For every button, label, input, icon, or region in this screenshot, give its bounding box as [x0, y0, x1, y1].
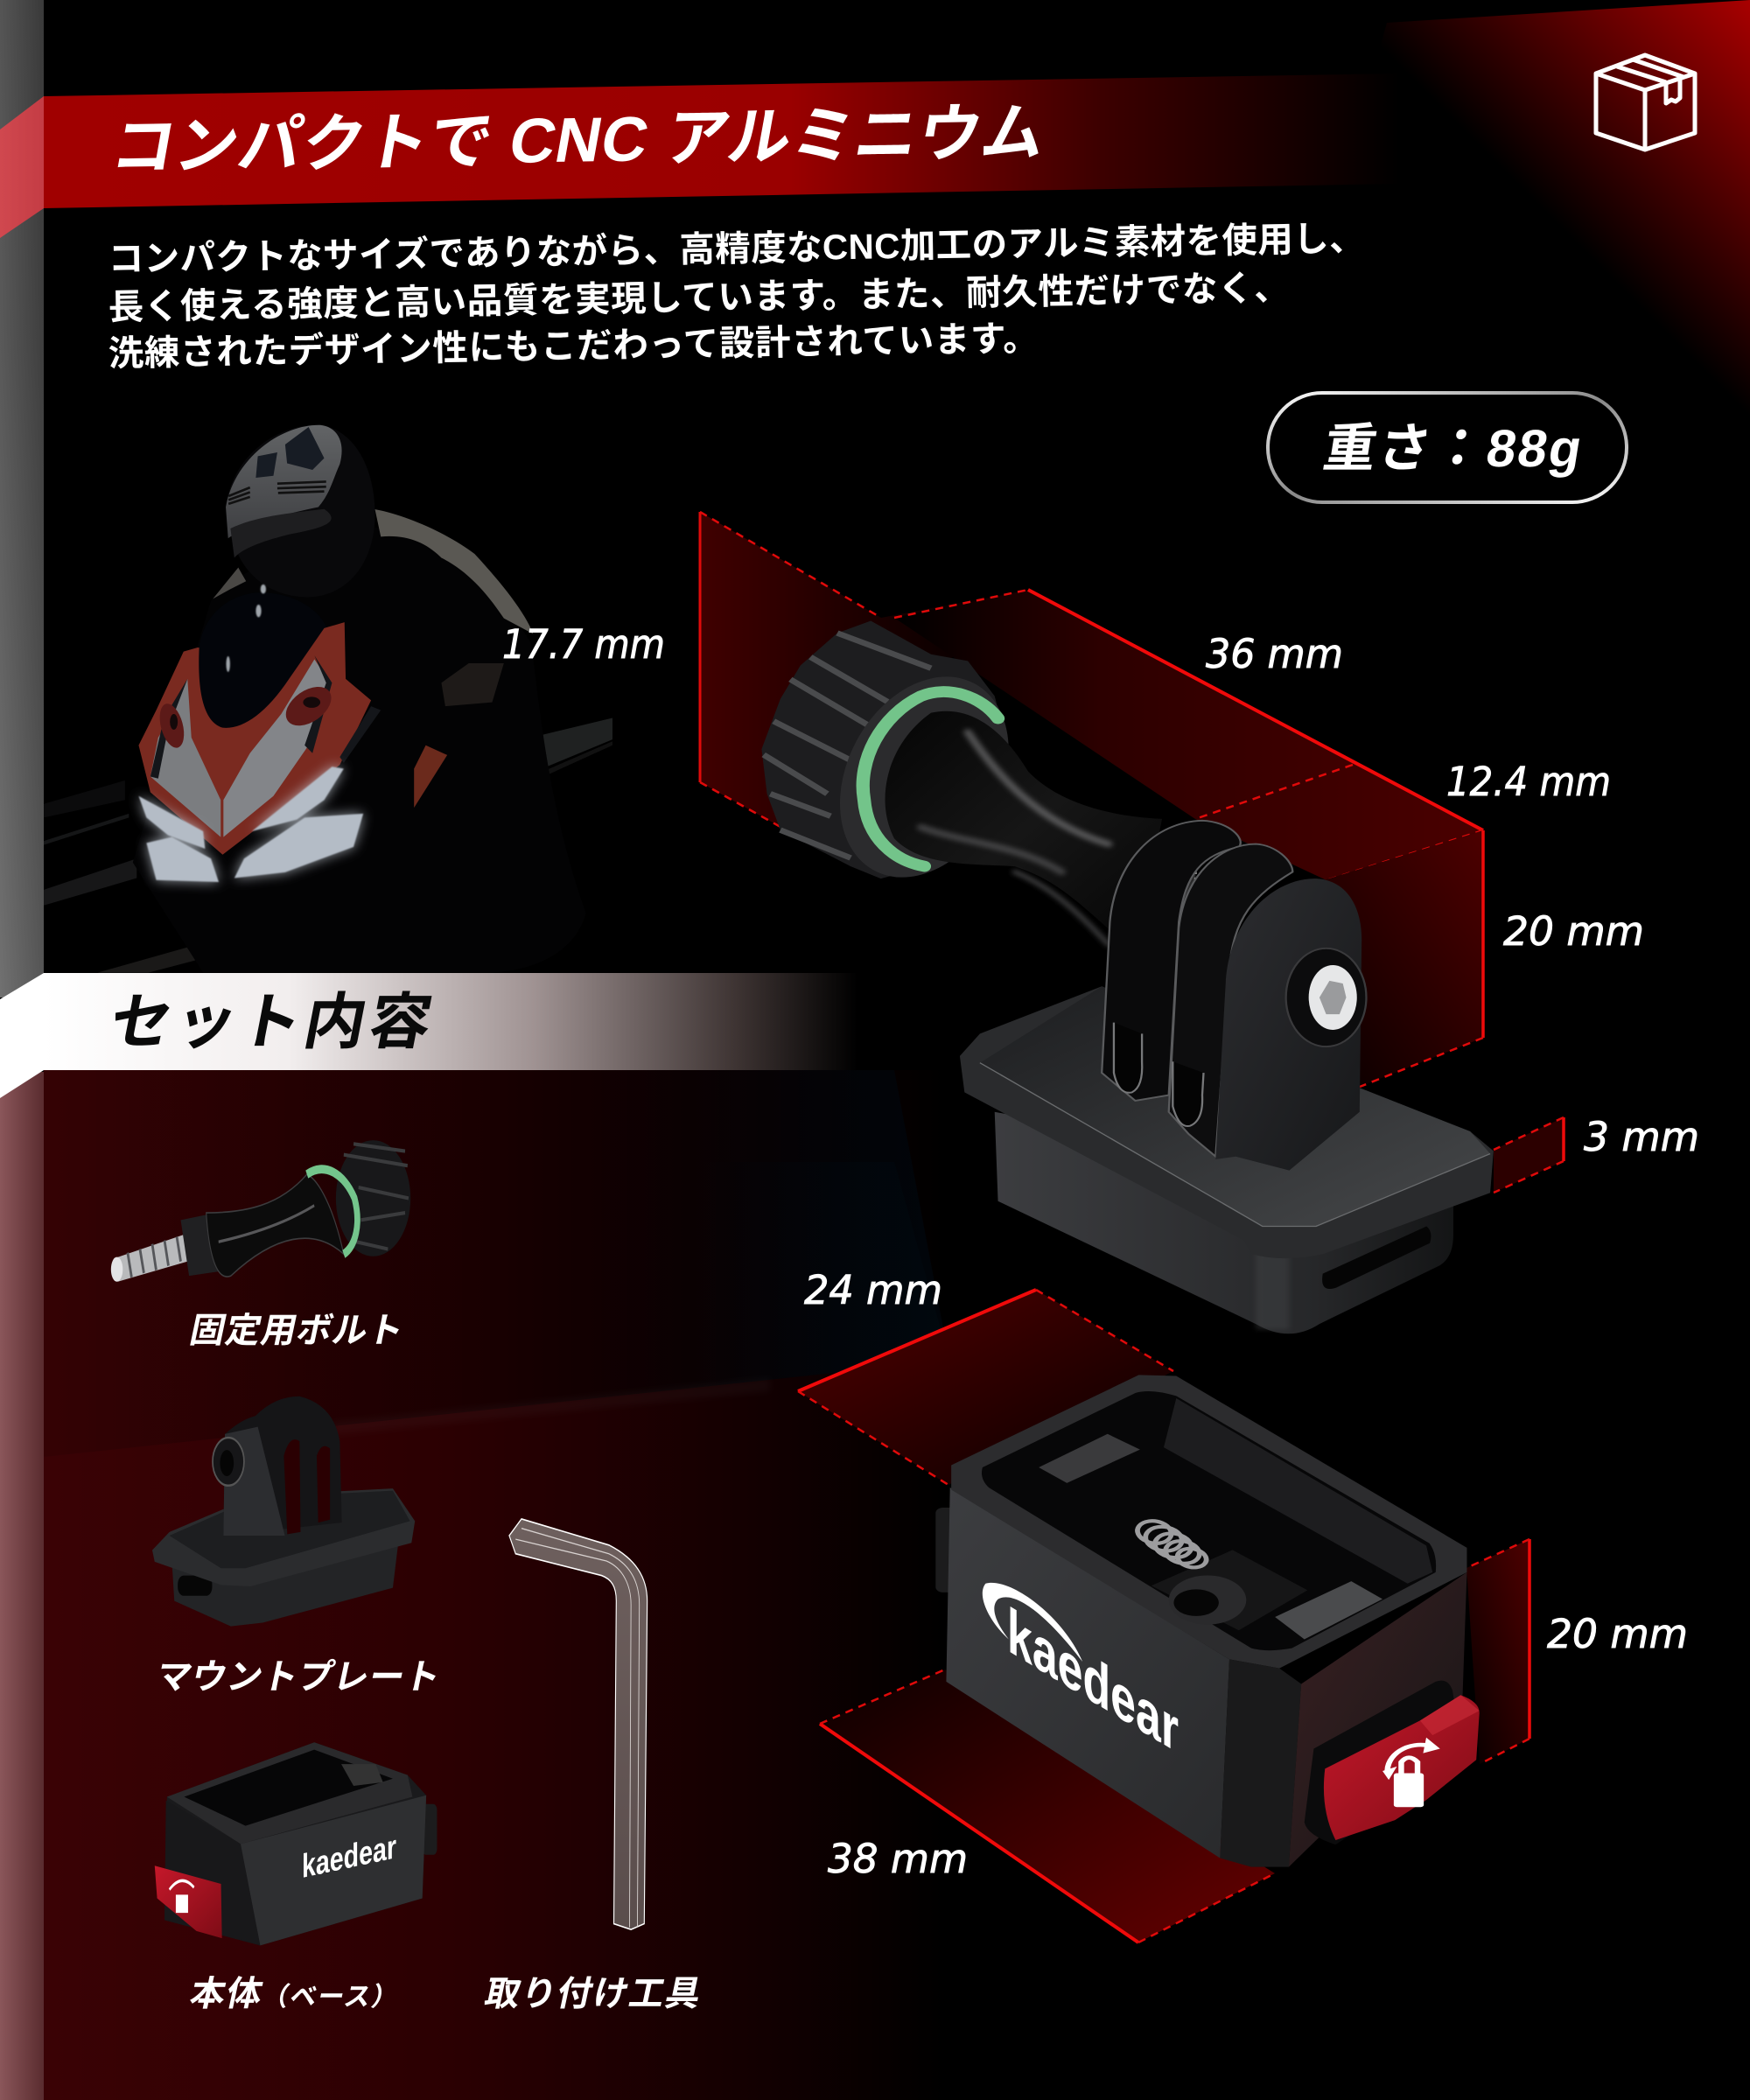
silhouette	[164, 1742, 426, 1945]
arm block	[223, 1396, 342, 1536]
plate	[152, 1488, 415, 1586]
tab	[341, 1764, 383, 1786]
front	[241, 1796, 426, 1945]
left strip: gray upper	[0, 0, 44, 998]
dimensions: upper mount	[700, 512, 1564, 1193]
left face	[946, 1488, 1229, 1858]
bolt end	[213, 1438, 244, 1486]
hex socket	[1320, 981, 1347, 1014]
silver washer	[1309, 965, 1357, 1030]
section heading: セット内容	[104, 988, 438, 1056]
arm slots	[1114, 1023, 1204, 1126]
product: set items	[111, 1140, 648, 1945]
helmet top	[226, 425, 342, 538]
red tank piece	[414, 746, 447, 808]
captions	[152, 1310, 705, 2013]
line 2: 長く使える強度と高い品質を実現しています。また、耐久性だけでなく、	[108, 268, 1290, 327]
ball stem	[885, 711, 1162, 950]
knurled thread	[1142, 872, 1195, 944]
rim top	[951, 1375, 1466, 1669]
plate top face	[980, 986, 1490, 1226]
headlight glow	[138, 766, 363, 882]
fold white	[0, 973, 44, 1098]
side knob	[935, 1508, 961, 1592]
button bevel	[1420, 1695, 1480, 1735]
item: mini base	[155, 1742, 437, 1945]
weight badge	[1268, 393, 1627, 502]
stem highlights	[921, 732, 1109, 944]
left strip: red lower	[0, 1072, 44, 2100]
panel 38mm	[820, 1670, 1275, 1942]
collar	[181, 1213, 223, 1276]
red button	[155, 1866, 222, 1938]
tab 2	[1275, 1581, 1382, 1639]
line 3: 洗練されたデザイン性にもこだわって設計されています。	[108, 318, 1039, 374]
label 17.7: 17.7 mm	[502, 621, 665, 668]
plate lower body	[995, 1112, 1453, 1334]
item: bolt	[111, 1140, 410, 1282]
knob	[761, 620, 1003, 878]
arm 1	[1102, 821, 1241, 1101]
red fairing	[138, 622, 371, 855]
dark panel stripes	[150, 655, 381, 779]
hex key edges	[515, 1529, 640, 1928]
plate highlight	[980, 1063, 1490, 1226]
caption: tool: 取り付け工具	[481, 1973, 705, 2013]
label 12.4: 12.4 mm	[1446, 759, 1611, 805]
red lock button	[1324, 1695, 1480, 1840]
knob ridges	[764, 633, 931, 858]
helmet dark panel	[256, 427, 325, 478]
dimensions: lower base	[798, 1290, 1530, 1942]
lower body	[172, 1539, 399, 1627]
logo text: base: kaedear	[1007, 1593, 1179, 1767]
stem highlight	[219, 1206, 314, 1242]
stem	[206, 1174, 344, 1277]
arm front face	[223, 1427, 284, 1536]
weight text: 重さ：88g	[1320, 418, 1586, 478]
windshield	[199, 592, 328, 728]
label 3: 3 mm	[1584, 1114, 1699, 1160]
inner wall	[1164, 1398, 1432, 1584]
right white panel	[223, 660, 330, 837]
helmet shell	[228, 425, 374, 571]
jacket	[133, 735, 550, 961]
label 20 upper: 20 mm	[1503, 908, 1644, 955]
label 36: 36 mm	[1206, 631, 1343, 677]
logo text: mini base: kaedear	[302, 1828, 396, 1886]
jacket shoulder stripe	[375, 509, 533, 634]
label 38: 38 mm	[828, 1836, 968, 1882]
body text	[108, 218, 1365, 374]
front arm	[1215, 878, 1362, 1171]
icon: box	[1596, 55, 1695, 150]
panel 20mm lower	[1466, 1539, 1530, 1764]
panel 3mm	[1494, 1117, 1564, 1193]
top	[167, 1742, 412, 1844]
helmet chin	[230, 509, 332, 557]
panel 17.7mm	[700, 512, 1028, 827]
line 1: コンパクトなサイズでありながら、高精度なCNC加工のアルミ素材を使用し、	[108, 218, 1365, 279]
spring	[1131, 1516, 1211, 1572]
glove	[441, 663, 504, 706]
caption: bolt: 固定用ボルト	[186, 1310, 408, 1350]
label 24: 24 mm	[804, 1267, 942, 1313]
slot	[178, 1576, 212, 1596]
label 20 lower: 20 mm	[1547, 1611, 1688, 1657]
item: hex key	[509, 1519, 648, 1929]
panel 24mm	[798, 1290, 1173, 1485]
screw	[114, 1235, 187, 1282]
plate rim	[960, 986, 1494, 1258]
product: base with lock	[935, 1375, 1480, 1867]
arm slots	[284, 1439, 330, 1534]
ring	[307, 1169, 357, 1254]
plate face	[170, 1491, 410, 1568]
bolt head	[1286, 948, 1366, 1046]
left shoulder piece	[213, 568, 246, 598]
fold red	[0, 96, 44, 238]
rear knob	[423, 1804, 437, 1855]
item: mini mount	[152, 1396, 415, 1627]
photo: motorcycle rider at night	[44, 425, 612, 973]
tab 1	[1039, 1434, 1140, 1483]
knob flange	[811, 659, 1038, 896]
corner red gradient	[1225, 0, 1750, 612]
left face	[164, 1801, 260, 1945]
title band	[44, 74, 1400, 208]
corner chamfer	[1220, 1659, 1301, 1867]
right face	[1289, 1572, 1466, 1867]
dimension labels	[502, 621, 1699, 1882]
section band: set contents	[44, 973, 858, 1070]
headlights	[138, 766, 363, 882]
interior	[184, 1750, 393, 1826]
panel: set contents background	[44, 1070, 949, 2100]
logo swoosh	[983, 1583, 1082, 1662]
title: コンパクトで CNC アルミニウム	[106, 98, 1051, 183]
green ring	[863, 692, 998, 866]
windshield highlights	[226, 584, 266, 672]
red mirrors	[156, 679, 339, 751]
caption: mount plate: マウントプレート	[152, 1656, 444, 1697]
plate corner sheen	[1256, 1246, 1289, 1329]
knob	[336, 1140, 410, 1256]
arm 2	[1169, 844, 1292, 1157]
interior	[982, 1391, 1436, 1650]
mini lock	[176, 1894, 188, 1913]
caption: base: 本体（ベース）	[186, 1973, 403, 2013]
panel 20mm upper	[1312, 830, 1483, 1087]
left white panel	[150, 679, 220, 837]
lock icon	[1382, 1738, 1440, 1807]
road streaks	[44, 718, 612, 973]
helmet vents	[228, 481, 326, 504]
plate slot	[1322, 1226, 1431, 1289]
button recess	[1305, 1681, 1464, 1844]
inner block	[1152, 1550, 1307, 1630]
product: mount with bolt	[761, 620, 1494, 1334]
panel 36mm	[894, 590, 1483, 880]
threaded hole	[1169, 1576, 1246, 1625]
